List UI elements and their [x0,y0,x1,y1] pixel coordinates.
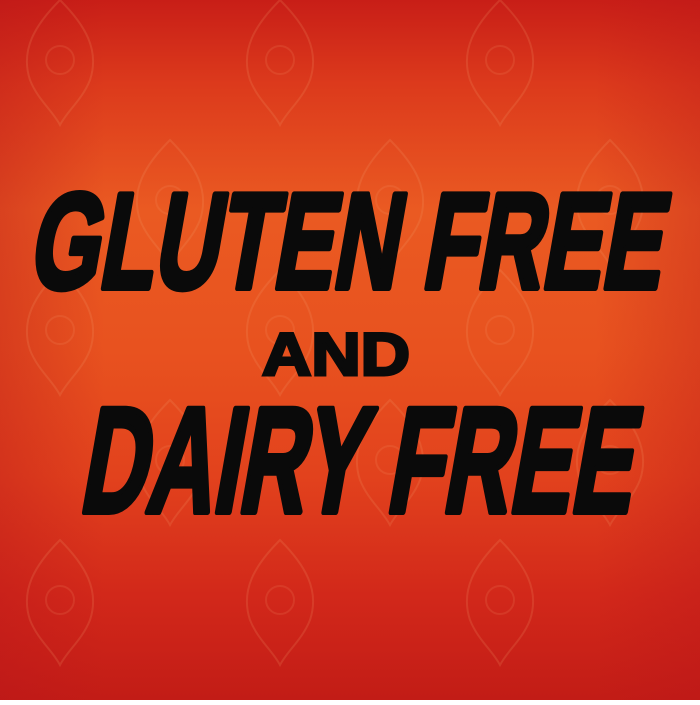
text: and: AND [262,321,410,388]
